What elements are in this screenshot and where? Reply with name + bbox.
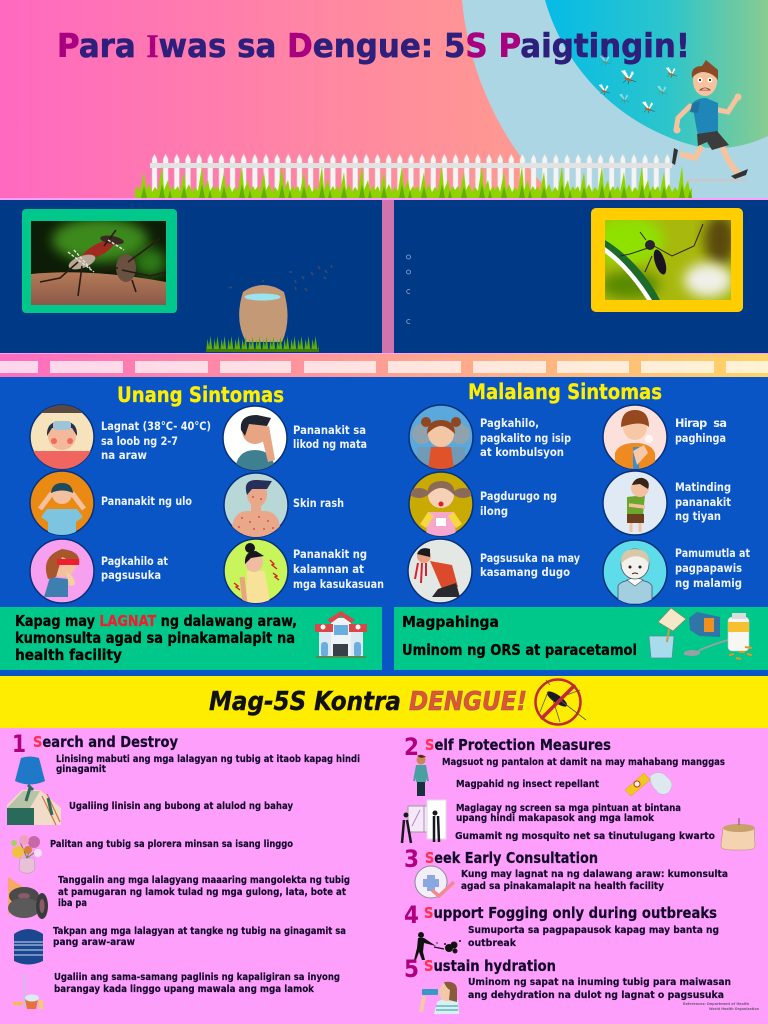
- severe: vomiting blood: kasamang dugo: [480, 566, 570, 579]
- symptom: muscle and joint pain: kalamnan at: [293, 563, 365, 576]
- severe: vomiting blood: [408, 539, 581, 603]
- step 1: search and destroy: Linising mabuti ang mga lalagyan ng tubig at itaob kapag hindi: [56, 754, 360, 765]
- icon: person in long sleeves: [413, 755, 429, 796]
- icon: flower vase: [11, 835, 42, 874]
- symptom: eye pain: [223, 406, 367, 470]
- severe: difficulty breathing: paghinga: [675, 432, 726, 445]
- severe: confusion and convulsion: Pagkahilo,: [480, 417, 539, 430]
- step 1: search and destroy: 1: [12, 730, 26, 758]
- severe: severe abdominal pain: [603, 471, 732, 535]
- symptom: eye pain: Pananakit sa: [293, 424, 366, 437]
- symptom: muscle and joint pain: [224, 539, 384, 603]
- icon: upturned bucket: [15, 756, 45, 784]
- severe: difficulty breathing: Hirap sa: [675, 417, 727, 430]
- severe: paleness and cold sweat: [603, 540, 750, 604]
- step 2: self protection measures: [404, 733, 725, 842]
- illustration: water barrel with mosquitoes: [206, 265, 332, 352]
- icon: water tank: [14, 929, 43, 964]
- step 1: search and destroy: Tanggalin ang mga lalagyang maaaring mangolekta ng tubig: [58, 875, 350, 886]
- severe: paleness and cold sweat: Pamumutla at: [675, 547, 750, 560]
- step 1: search and destroy: [12, 730, 360, 995]
- symptom: headache: [30, 471, 192, 535]
- step 2: self protection measures: Magsuot ng pantalon at damit na may mahabang manggas: [442, 757, 725, 768]
- severe: vomiting blood: Pagsusuka na may: [480, 552, 581, 565]
- heading: first symptoms: Unang Sintomas: [117, 383, 284, 407]
- panel: 5S banner: [0, 675, 768, 728]
- symptom: eye pain: likod ng mata: [293, 438, 367, 451]
- running man: [672, 60, 748, 182]
- severe: severe abdominal pain: pananakit: [675, 496, 732, 509]
- icon: ORS and paracetamol: [649, 608, 752, 659]
- symptom: headache: Pananakit ng ulo: [101, 495, 192, 508]
- step 2: self protection measures: Gumamit ng mosquito net sa tinutulugang kwarto: [455, 831, 715, 842]
- step 4: support fogging: [404, 901, 719, 949]
- symptom: skin rash: Skin rash: [293, 497, 344, 510]
- step 2: self protection measures: 2: [404, 733, 419, 761]
- step 5: sustain hydration: [404, 955, 731, 1001]
- picket fence: [150, 154, 672, 194]
- step 4: support fogging: 4: [404, 901, 419, 929]
- icon: medical check: [415, 866, 454, 898]
- step 4: support fogging: outbreak: [468, 938, 516, 949]
- icon: person drinking water: [421, 982, 459, 1014]
- step 3: seek early consultation: 3: [404, 845, 419, 873]
- icon: fogging worker: [414, 932, 461, 960]
- step 1: search and destroy: at pamugaran ng lamok tulad ng mga gulong, lata, bote at: [58, 887, 346, 898]
- title: Para Iwas sa Dengue: 5S Paigtingin!: [57, 26, 690, 65]
- step 3: seek early consultation: Kung may lagnat na ng dalawang araw: kumonsulta: [461, 869, 728, 880]
- references: World Health Organization: [709, 1006, 759, 1011]
- severe: confusion and convulsion: [409, 405, 571, 471]
- step 1: search and destroy: iba pa: [58, 898, 87, 909]
- callout: fever advice: health facility: [15, 646, 122, 664]
- step 1: search and destroy: Search and Destroy: [33, 733, 178, 751]
- icon: hospital: [315, 611, 367, 658]
- callout: rest and medicine: Magpahinga: [402, 613, 499, 631]
- faint list markers: [406, 255, 410, 324]
- step 2: self protection measures: Magpahid ng insect repellant: [456, 779, 599, 790]
- step 1: search and destroy: barangay kada linggo upang mawala ang mga lamok: [54, 984, 314, 995]
- icon: installing window screen: [402, 800, 446, 843]
- step 3: seek early consultation: [404, 845, 728, 892]
- step 2: self protection measures: upang hindi makapasok ang mga lamok: [456, 813, 654, 824]
- symptom: dizziness and vomiting: pagsusuka: [101, 569, 161, 582]
- icon: cleaning supplies: [13, 974, 43, 1009]
- step 5: sustain hydration: ang dehydration na dulot ng lagnat o pagsusuka: [468, 990, 724, 1001]
- step 1: search and destroy: Ugaliin ang sama-samang paglinis ng kapaligiran sa inyong: [54, 972, 340, 983]
- references: [683, 1001, 759, 1011]
- mosquitoes chasing runner: [599, 55, 677, 113]
- symptom: muscle and joint pain: Pananakit ng: [293, 548, 367, 561]
- icon: stacked tires: [8, 877, 48, 919]
- step 1: search and destroy: Ugaliing linisin ang bubong at alulod ng bahay: [69, 801, 293, 812]
- severe: nose bleeding: Pagdurugo ng: [480, 490, 557, 503]
- panel: symptoms: [0, 377, 768, 675]
- photo: mosquito on skin: [22, 209, 177, 313]
- callout: fever advice: kumonsulta agad sa pinakamalapit na: [15, 629, 295, 647]
- icon: roof cleaning: [7, 785, 61, 825]
- step 4: support fogging: Support Fogging only during outbreaks: [424, 904, 717, 922]
- severe: confusion and convulsion: at kombulsyon: [480, 446, 564, 459]
- step 1: search and destroy: ginagamit: [56, 764, 106, 775]
- panel: navy mosquito band: [0, 200, 768, 353]
- icon: repellent spray: [625, 772, 672, 796]
- step 1: search and destroy: pang araw-araw: [53, 937, 135, 948]
- severe: nose bleeding: ilong: [480, 505, 508, 518]
- step 5: sustain hydration: 5: [404, 955, 419, 983]
- references: References: Department of Health: [683, 1001, 749, 1006]
- icon: mosquito net: [721, 818, 755, 850]
- severe: difficulty breathing: [603, 405, 727, 469]
- grass: [135, 160, 692, 198]
- step 2: self protection measures: Maglagay ng screen sa mga pintuan at bintana: [456, 803, 681, 814]
- severe: paleness and cold sweat: pagpapawis: [675, 562, 742, 575]
- callout: rest and medicine: Uminom ng ORS at paracetamol: [402, 641, 637, 659]
- header banner: [0, 0, 768, 198]
- symptom: fever: sa loob ng 2-7: [101, 435, 178, 448]
- step 2: self protection measures: Self Protection Measures: [425, 736, 611, 754]
- symptom: fever: na araw: [101, 449, 148, 462]
- callout: fever advice: [0, 607, 382, 670]
- severe: confusion and convulsion: pagkalito ng isip: [480, 432, 571, 445]
- severe: paleness and cold sweat: ng malamig: [675, 577, 742, 590]
- decorative ribbon strip: [0, 354, 768, 377]
- symptom: fever: [30, 405, 211, 471]
- step 3: seek early consultation: agad sa pinakamalapit na health facility: [461, 881, 664, 892]
- callout: rest and medicine: [394, 607, 768, 670]
- step 1: search and destroy: Palitan ang tubig sa plorera minsan sa isang linggo: [50, 839, 293, 850]
- symptom: skin rash: [224, 473, 344, 537]
- banner heading: Mag-5S Kontra DENGUE!: [209, 687, 527, 717]
- severe: nose bleeding: [409, 472, 557, 536]
- symptom: dizziness and vomiting: Pagkahilo at: [101, 555, 169, 568]
- step 1: search and destroy: Takpan ang mga lalagyan at tangke ng tubig na ginagamit sa: [53, 926, 346, 937]
- step 5: sustain hydration: Sustain hydration: [424, 957, 556, 975]
- symptom: muscle and joint pain: mga kasukasuan: [293, 578, 384, 591]
- photo: mosquito on leaf: [591, 208, 743, 312]
- severe: severe abdominal pain: ng tiyan: [675, 510, 721, 523]
- step 3: seek early consultation: Seek Early Consultation: [425, 849, 598, 867]
- step 4: support fogging: Sumuporta sa pagpapausok kapag may banta ng: [468, 925, 719, 936]
- callout: fever advice: Kapag may LAGNAT ng dalawang araw,: [15, 612, 297, 630]
- symptom: dizziness and vomiting: [30, 539, 169, 603]
- icon: no mosquito: [536, 680, 586, 724]
- symptom: fever: Lagnat (38°C- 40°C): [101, 420, 211, 433]
- step 5: sustain hydration: Uminom ng sapat na inuming tubig para maiwasan: [468, 977, 731, 988]
- severe: severe abdominal pain: Matinding: [675, 481, 731, 494]
- divider: [382, 200, 394, 353]
- heading: severe symptoms: Malalang Sintomas: [468, 380, 662, 404]
